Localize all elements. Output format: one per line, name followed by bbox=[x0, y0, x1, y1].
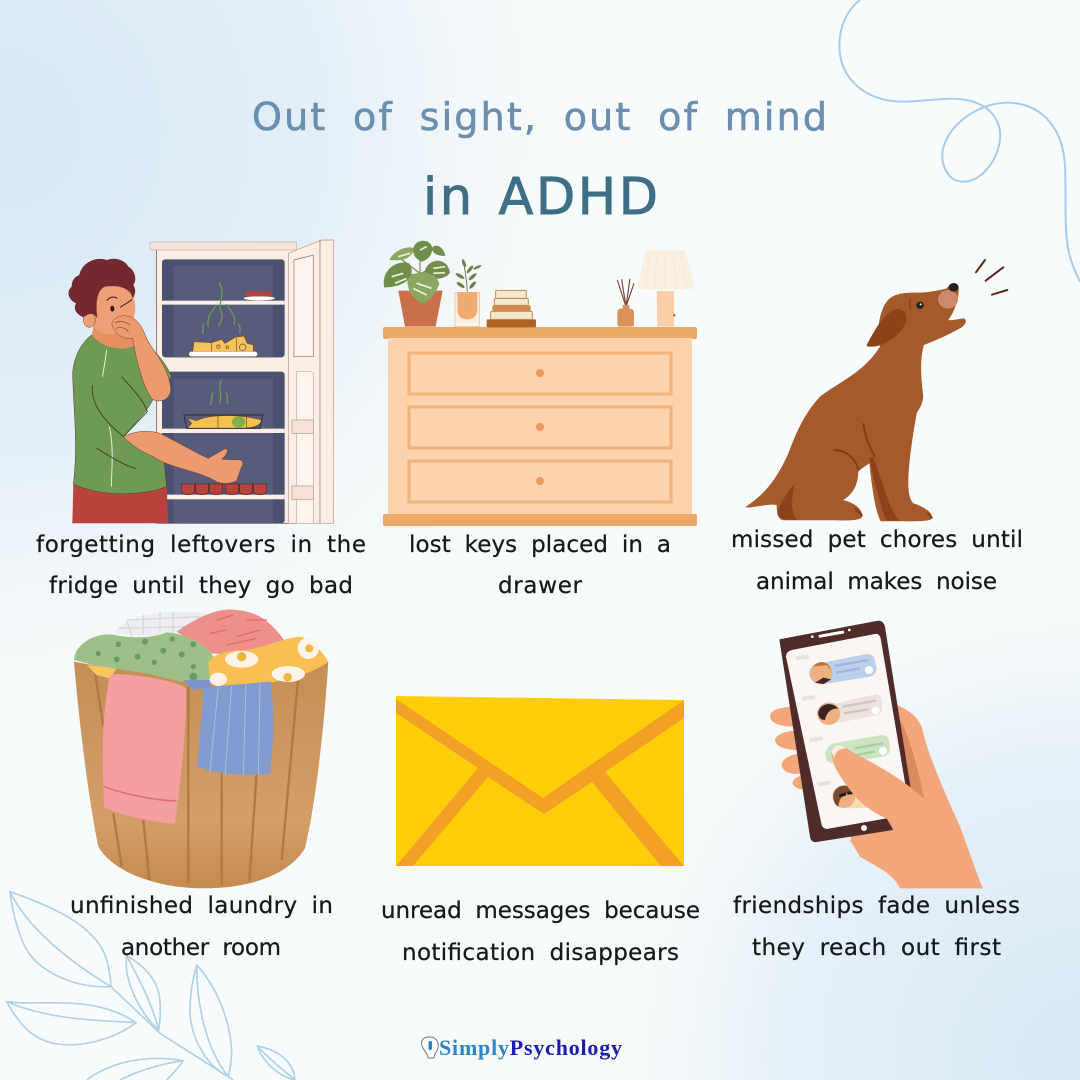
caption: messages: notification disappears bbox=[402, 940, 679, 966]
pink cloth bbox=[177, 609, 284, 655]
dog shading bbox=[777, 457, 900, 521]
fridge bbox=[150, 240, 333, 523]
logo: Simply Psychology bbox=[422, 1035, 622, 1060]
drawer 3 bbox=[409, 461, 671, 502]
caption: messages bbox=[381, 898, 700, 966]
phone screen bbox=[786, 634, 906, 829]
thumb and front of hand bbox=[832, 746, 983, 888]
dresser top bbox=[383, 327, 697, 339]
caption: friendships: they reach out first bbox=[752, 935, 1001, 961]
caption: laundry: another room bbox=[121, 935, 281, 961]
logo text: SimplyPsychology bbox=[439, 1035, 622, 1060]
eye bbox=[916, 302, 924, 309]
bark lines bbox=[976, 260, 1007, 295]
smell lines bbox=[203, 283, 240, 405]
illustration: dresser with decor bbox=[383, 241, 697, 526]
decorative leaves bottom left bbox=[7, 892, 295, 1080]
caption: friendships: friendships fade unless bbox=[733, 893, 1020, 919]
lower arm and hand bbox=[123, 431, 243, 484]
upper arm and hand on nose bbox=[112, 316, 171, 401]
caption: leftovers: fridge until they go bad bbox=[49, 573, 353, 599]
fingers behind phone bbox=[770, 707, 807, 790]
shirt bbox=[73, 335, 172, 494]
neck and face bbox=[92, 320, 140, 349]
message 1 bbox=[796, 654, 877, 684]
caption: lost keys: lost keys placed in a bbox=[409, 532, 671, 558]
caption: pet chores: missed pet chores until bbox=[731, 527, 1023, 553]
decorative curl line top right bbox=[839, 0, 1080, 282]
caption: pet chores: animal makes noise bbox=[756, 569, 997, 595]
trousers bbox=[72, 484, 168, 523]
caption: laundry: unfinished laundry in bbox=[70, 893, 333, 919]
food: red cups bbox=[181, 484, 267, 495]
message 3 bbox=[809, 735, 890, 764]
yellow scrap under green cloth bbox=[87, 665, 117, 678]
caption: lost keys: drawer bbox=[498, 573, 583, 599]
reed diffuser bbox=[617, 279, 634, 327]
caption: leftovers: forgetting leftovers in the bbox=[36, 532, 366, 558]
palm behind phone bbox=[847, 705, 983, 888]
basket slats bbox=[95, 672, 298, 885]
illustration: unread envelope bbox=[396, 696, 684, 866]
caption: leftovers bbox=[36, 532, 366, 599]
hair bbox=[69, 259, 135, 318]
envelope body bbox=[396, 696, 684, 866]
drawer 1 bbox=[409, 353, 671, 394]
man bbox=[69, 259, 243, 523]
muzzle patch and nose bbox=[938, 290, 958, 309]
message 4 bbox=[817, 778, 893, 808]
caption: messages: unread messages because bbox=[381, 898, 700, 924]
table lamp bbox=[637, 250, 695, 327]
pink towel bbox=[103, 674, 186, 824]
blue cloth bbox=[197, 682, 273, 775]
illustration: laundry basket bbox=[74, 609, 328, 888]
phone speaker and button bbox=[811, 629, 867, 831]
caption: laundry bbox=[70, 893, 333, 961]
title line 2: in ADHD bbox=[423, 168, 658, 227]
eyes bbox=[110, 306, 114, 312]
caption: friendships bbox=[733, 893, 1020, 961]
title line 1: Out of sight, out of mind bbox=[252, 95, 827, 139]
illustration: hand holding phone bbox=[770, 621, 983, 888]
stack of books bbox=[487, 290, 536, 327]
message 2 bbox=[802, 694, 883, 725]
illustration: man smelling spoiled food in fridge bbox=[69, 240, 333, 523]
title bbox=[252, 95, 827, 227]
caption: lost keys bbox=[409, 532, 671, 599]
phone body bbox=[779, 621, 911, 842]
food: steak on plate bbox=[244, 292, 275, 300]
green cloth bbox=[74, 632, 213, 682]
illustration: barking dog bbox=[745, 260, 1007, 521]
basket body bbox=[74, 662, 328, 888]
ear bbox=[867, 309, 907, 347]
plant pot bbox=[384, 241, 450, 327]
food: fish in dish bbox=[184, 414, 263, 428]
dog body bbox=[745, 283, 966, 521]
drawer 2 bbox=[409, 407, 671, 448]
dresser base bbox=[383, 514, 697, 526]
small plant in glass vase bbox=[455, 259, 482, 327]
caption: pet chores bbox=[731, 527, 1023, 595]
food: cheese on plate bbox=[189, 336, 257, 356]
checked cloth bbox=[115, 612, 207, 640]
yellow cloth bbox=[183, 637, 328, 689]
logo icon bbox=[422, 1037, 438, 1058]
dresser body bbox=[388, 338, 692, 516]
envelope flap lines bbox=[396, 699, 684, 866]
